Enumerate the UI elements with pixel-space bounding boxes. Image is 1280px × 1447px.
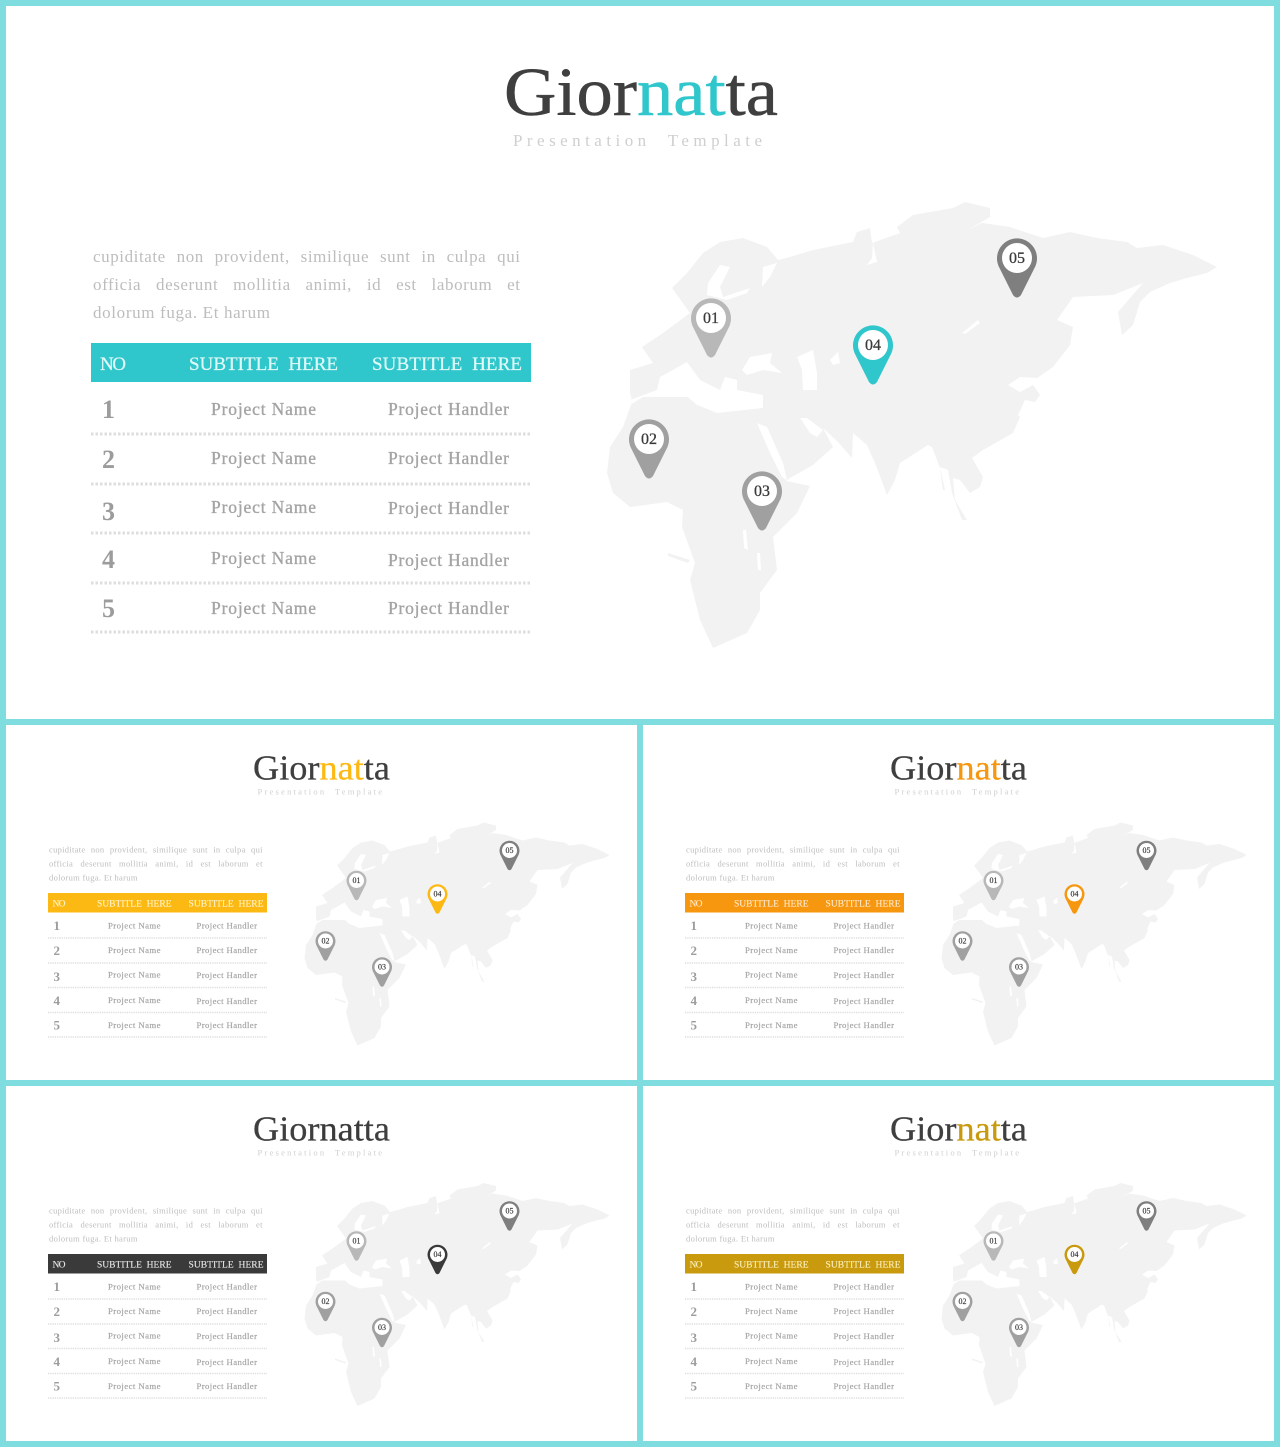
table: Project Handler <box>196 1282 257 1292</box>
paragraph: cupiditate non provident, similique sunt in culpa qui <box>49 1206 263 1216</box>
table: 3 <box>54 1330 60 1345</box>
paragraph: officia deserunt mollitia animi, id est laborum et <box>686 858 900 868</box>
table <box>685 1254 904 1398</box>
table: Project Handler <box>834 1331 894 1341</box>
world map and pins: 02 <box>322 936 330 946</box>
world map and pins <box>942 1183 1246 1406</box>
pin 01: 01 <box>703 310 719 327</box>
table: 3 <box>690 969 698 984</box>
pin 02: 02 <box>641 431 657 448</box>
title: Giornatta <box>504 54 778 130</box>
subtitle: Presentation Template <box>894 786 1019 796</box>
world map and pins <box>304 822 610 1046</box>
table: Project Handler <box>196 920 257 930</box>
table: 3 <box>102 497 115 526</box>
world map and pins: 03 <box>1015 1323 1023 1332</box>
table: 5 <box>690 1378 698 1394</box>
paragraph: dolorum fuga. Et harum <box>686 872 775 882</box>
table: Project Handler <box>196 996 257 1006</box>
table: Project Name <box>108 945 161 955</box>
table: 5 <box>690 1018 698 1032</box>
panel: main slide teal <box>6 6 1274 719</box>
world map and pins: 01 <box>990 876 998 885</box>
table: 4 <box>102 545 115 574</box>
world map and pins: 05 <box>506 846 514 855</box>
table: Project Name <box>745 995 798 1005</box>
paragraph: dolorum fuga. Et harum <box>686 1234 775 1244</box>
subtitle: Presentation Template <box>258 1148 382 1158</box>
panel: gold slide <box>643 1086 1274 1441</box>
panel: dark slide <box>6 1086 637 1441</box>
pin 04: 04 <box>865 337 881 354</box>
table: Project Name <box>108 920 161 930</box>
panel: orange slide <box>643 725 1274 1080</box>
table: Project Name <box>745 1330 798 1340</box>
title: Giornatta <box>253 1110 390 1148</box>
table <box>48 1254 267 1398</box>
paragraph <box>686 1206 900 1244</box>
table: 4 <box>690 993 698 1008</box>
table: Project Name <box>108 1020 161 1030</box>
world map and pins: 05 <box>506 1206 514 1216</box>
table: 4 <box>54 993 60 1008</box>
pin 01 <box>691 298 731 358</box>
world map and pins: 05 <box>1142 1206 1150 1216</box>
table: Project Handler <box>834 996 894 1006</box>
table: SUBTITLE HERE <box>826 1260 901 1270</box>
subtitle: Presentation Template <box>894 1148 1019 1158</box>
subtitle: Presentation Template <box>513 131 762 150</box>
world map and pins: 03 <box>1015 962 1023 972</box>
pin 02 <box>629 419 669 478</box>
table: 1 <box>54 1279 60 1294</box>
table: 1 <box>102 395 115 424</box>
world map and pins: 04 <box>434 890 442 898</box>
table: 1 <box>690 1279 697 1294</box>
table: SUBTITLE HERE <box>97 1260 172 1270</box>
subtitle: Presentation Template <box>258 786 382 796</box>
world map and pins: 02 <box>322 1297 330 1306</box>
paragraph: cupiditate non provident, similique sunt in culpa qui <box>93 247 520 266</box>
world map and pins: 04 <box>1070 1250 1078 1259</box>
table: Project Name <box>211 497 316 517</box>
world map and pins: 04 <box>1070 890 1078 898</box>
table: Project Name <box>108 1381 161 1391</box>
paragraph: cupiditate non provident, similique sunt in culpa qui <box>686 844 900 854</box>
table: Project Name <box>211 598 316 618</box>
title: Giornatta <box>890 1110 1027 1148</box>
table: 3 <box>54 969 60 984</box>
table: SUBTITLE HERE <box>826 900 901 910</box>
table <box>91 343 531 632</box>
table: Project Handler <box>196 1357 257 1367</box>
table: Project Handler <box>834 1306 894 1316</box>
pin 04 <box>853 325 893 384</box>
paragraph <box>49 844 263 882</box>
table: 2 <box>690 1304 697 1319</box>
table: 4 <box>54 1354 60 1369</box>
table: SUBTITLE HERE <box>189 354 338 375</box>
table <box>48 893 267 1037</box>
table: Project Name <box>211 399 316 419</box>
table: Project Name <box>745 1282 798 1292</box>
table: NO <box>690 1260 703 1270</box>
table: Project Handler <box>388 448 509 468</box>
world map <box>607 202 1217 648</box>
title: Giornatta <box>253 750 390 788</box>
table: NO <box>100 354 126 375</box>
world map and pins: 03 <box>378 962 386 972</box>
table: Project Name <box>108 970 161 980</box>
table: SUBTITLE HERE <box>372 354 522 375</box>
world map and pins: 01 <box>352 876 360 885</box>
table: SUBTITLE HERE <box>188 1260 264 1270</box>
table: 2 <box>54 943 60 958</box>
table: Project Handler <box>388 498 509 518</box>
table: NO <box>52 1260 66 1270</box>
table: Project Handler <box>196 1381 257 1391</box>
table: Project Handler <box>196 970 257 980</box>
table: NO <box>52 900 66 910</box>
world map and pins: 05 <box>1142 846 1150 855</box>
table: Project Handler <box>388 550 509 570</box>
table: Project Name <box>108 1356 161 1366</box>
table: 3 <box>690 1330 698 1345</box>
table: Project Name <box>745 1020 798 1030</box>
panel: yellow slide <box>6 725 637 1080</box>
table: Project Handler <box>834 970 894 980</box>
table: Project Handler <box>834 1282 894 1292</box>
table: Project Name <box>108 1306 161 1316</box>
table: Project Name <box>745 1356 798 1366</box>
world map and pins: 02 <box>958 936 966 946</box>
paragraph <box>49 1206 263 1244</box>
table: Project Handler <box>834 1020 894 1030</box>
table: Project Name <box>745 1381 798 1391</box>
table: 2 <box>54 1304 60 1319</box>
table: SUBTITLE HERE <box>188 900 264 910</box>
table: Project Handler <box>196 1306 257 1316</box>
table: 1 <box>690 918 697 933</box>
table: Project Name <box>211 448 316 468</box>
table: SUBTITLE HERE <box>734 900 809 910</box>
table: 5 <box>102 594 115 623</box>
table: Project Name <box>108 1330 161 1340</box>
table: Project Name <box>745 945 798 955</box>
table: SUBTITLE HERE <box>97 900 172 910</box>
world map and pins: 01 <box>352 1236 360 1246</box>
world map and pins: 04 <box>434 1250 442 1259</box>
paragraph: dolorum fuga. Et harum <box>93 303 270 322</box>
table: Project Handler <box>834 1381 894 1391</box>
table: Project Handler <box>388 598 509 618</box>
table: NO <box>690 900 703 910</box>
world map and pins: 01 <box>990 1236 998 1246</box>
title: Giornatta <box>890 750 1027 788</box>
table: Project Handler <box>834 920 894 930</box>
paragraph: officia deserunt mollitia animi, id est laborum et <box>686 1220 900 1230</box>
world map and pins <box>942 822 1246 1046</box>
table: Project Name <box>108 1282 161 1292</box>
table: 5 <box>54 1378 60 1394</box>
paragraph: officia deserunt mollitia animi, id est laborum et <box>49 858 263 868</box>
table: Project Name <box>108 995 161 1005</box>
world map and pins: 03 <box>378 1323 386 1332</box>
table: 2 <box>102 445 115 474</box>
pin 05 <box>997 238 1037 298</box>
pin 03: 03 <box>754 483 770 500</box>
table: Project Name <box>745 920 798 930</box>
table: Project Handler <box>388 399 509 419</box>
paragraph: cupiditate non provident, similique sunt in culpa qui <box>49 844 263 854</box>
paragraph: officia deserunt mollitia animi, id est laborum et <box>49 1220 263 1230</box>
table: Project Handler <box>196 945 257 955</box>
table: 2 <box>690 943 697 958</box>
paragraph: dolorum fuga. Et harum <box>49 872 138 882</box>
table: 5 <box>54 1018 60 1032</box>
table: Project Handler <box>834 1357 894 1367</box>
pin 05: 05 <box>1009 250 1025 267</box>
table <box>685 893 904 1037</box>
table: SUBTITLE HERE <box>734 1260 809 1270</box>
pin 03 <box>742 471 782 530</box>
paragraph: cupiditate non provident, similique sunt in culpa qui <box>686 1206 900 1216</box>
table: Project Name <box>745 970 798 980</box>
table: Project Handler <box>196 1020 257 1030</box>
table: Project Name <box>745 1306 798 1316</box>
table: Project Handler <box>196 1331 257 1341</box>
world map and pins <box>304 1183 610 1406</box>
world map and pins: 02 <box>958 1297 966 1306</box>
paragraph: dolorum fuga. Et harum <box>49 1234 138 1244</box>
paragraph <box>686 844 900 882</box>
table: 1 <box>54 918 60 933</box>
table: Project Name <box>211 548 316 568</box>
paragraph: officia deserunt mollitia animi, id est laborum et <box>93 275 520 294</box>
paragraph <box>93 247 520 322</box>
table: 4 <box>690 1354 698 1369</box>
table: Project Handler <box>834 945 894 955</box>
